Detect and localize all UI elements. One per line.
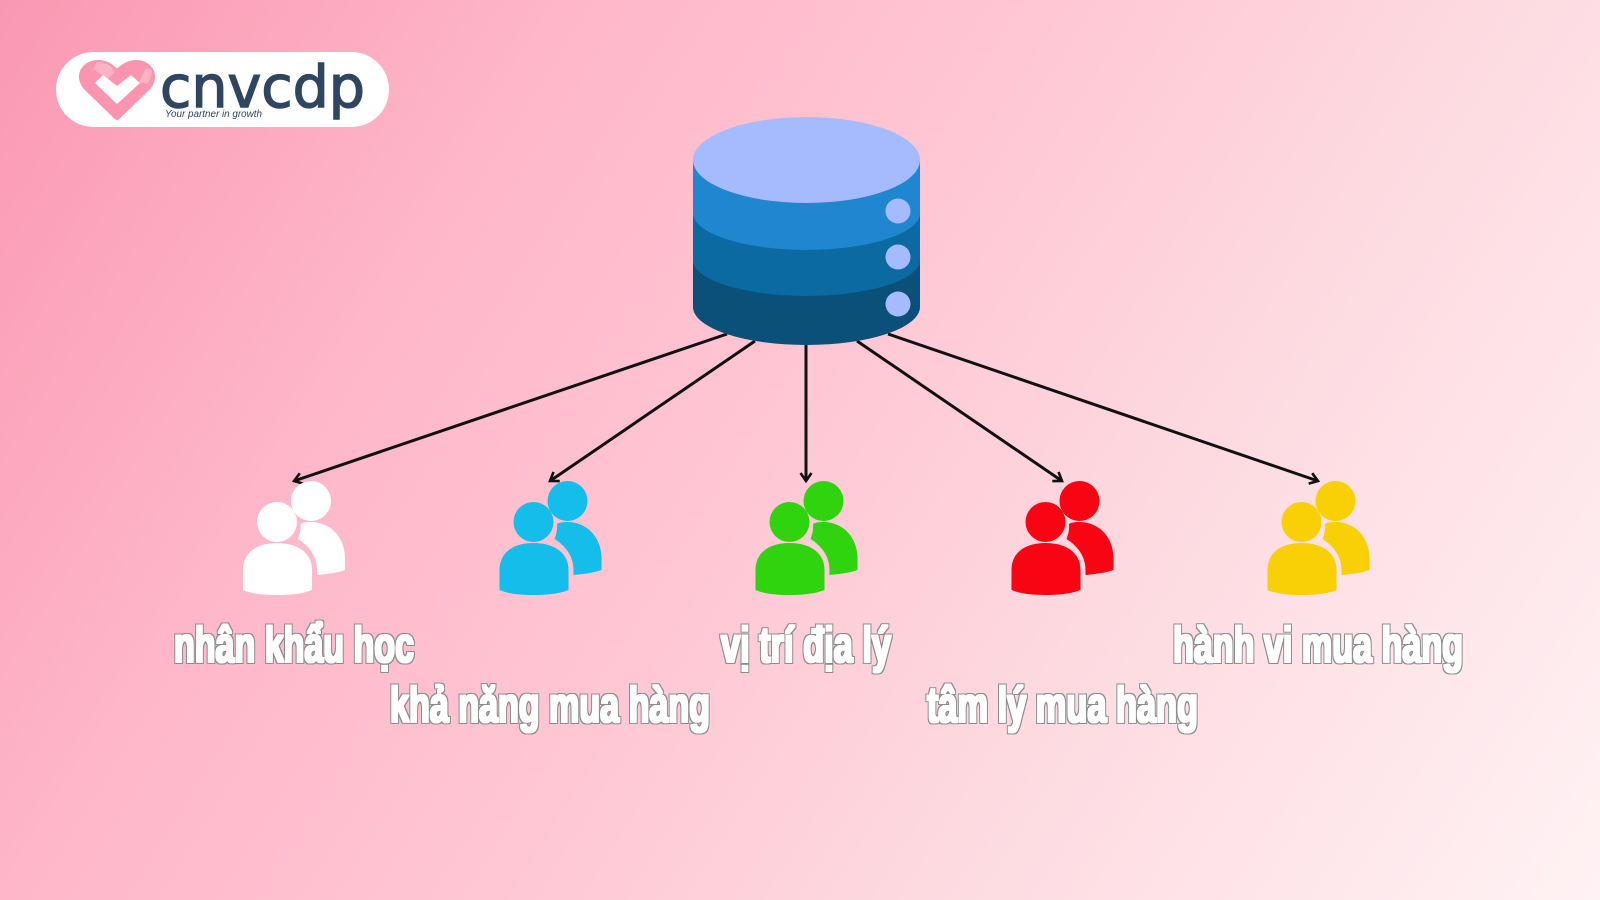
tagline: Your partner in growth xyxy=(165,109,262,120)
icon: database cylinder xyxy=(693,117,920,345)
icon: white people xyxy=(243,481,345,595)
icon: green people xyxy=(756,481,858,595)
label: hành vi mua hàng: hành vi mua hàng xyxy=(1173,617,1463,673)
label: nhân khẩu học: nhân khẩu học xyxy=(174,617,414,673)
icon: heart xyxy=(82,62,152,117)
wordmark: cnvcdp xyxy=(160,53,365,121)
label: khả năng mua hàng: khả năng mua hàng xyxy=(390,677,710,733)
label: vị trí địa lý: vị trí địa lý xyxy=(721,617,891,673)
logo: cnvcdp xyxy=(56,52,389,127)
icon: yellow people xyxy=(1268,481,1370,595)
icon: blue people xyxy=(500,481,602,595)
icon: red people xyxy=(1012,481,1114,595)
arrows: database to segments xyxy=(294,334,1318,481)
label: tâm lý mua hàng: tâm lý mua hàng xyxy=(927,677,1198,733)
